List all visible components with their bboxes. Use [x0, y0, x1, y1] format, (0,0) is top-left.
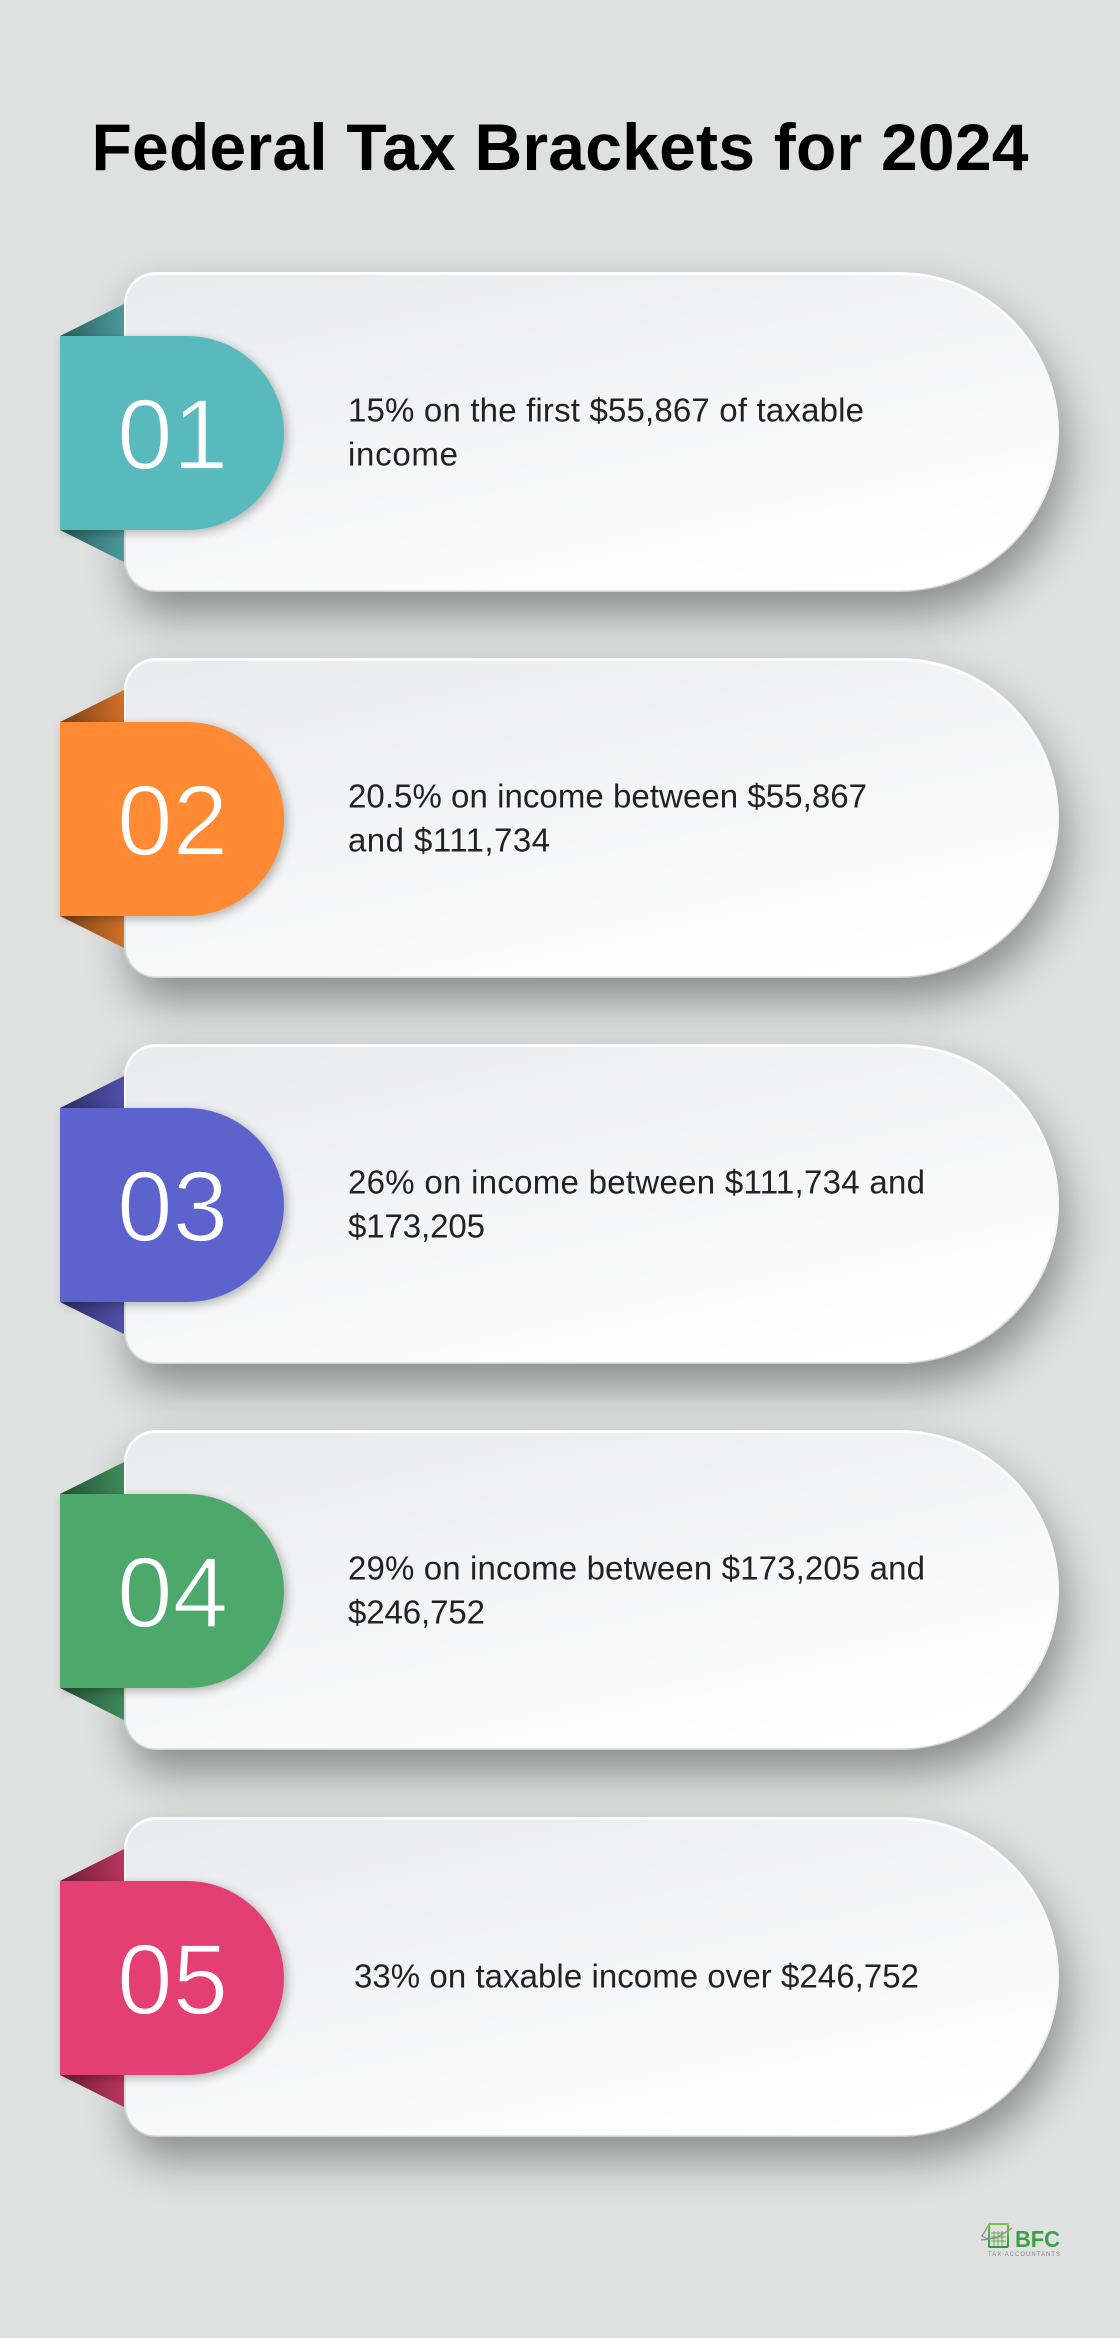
fold: top and bottom of tab 01	[60, 304, 124, 562]
number tab 05	[60, 1881, 284, 2075]
number tab 03: 03	[117, 1151, 228, 1263]
fold: top and bottom of tab 02	[60, 690, 124, 948]
number tab 01	[60, 336, 284, 530]
fold: top and bottom of tab 03	[60, 1076, 124, 1334]
panel: bracket 03	[60, 1044, 1065, 1386]
text 03: $173,205	[348, 1208, 485, 1244]
logo: BFC Tax Accountants	[981, 2223, 1060, 2258]
text 03	[348, 1164, 925, 1244]
number tab 04	[60, 1494, 284, 1688]
text 02	[348, 778, 867, 858]
text 02: and $111,734	[348, 822, 550, 858]
panel: bracket 01	[60, 272, 1065, 614]
icon: calculator	[981, 2223, 1012, 2247]
number tab 01: 01	[117, 379, 228, 491]
panel: bracket 04	[60, 1430, 1065, 1772]
text 03: 26% on income between $111,734 and	[348, 1164, 925, 1200]
number tab 02: 02	[117, 765, 228, 877]
text 04	[348, 1550, 925, 1630]
number tab 02	[60, 722, 284, 916]
text 01	[348, 392, 864, 472]
logo tagline: TAX ACCOUNTANTS	[988, 2252, 1060, 2258]
number tab 04: 04	[117, 1537, 228, 1649]
fold: top and bottom of tab 05	[60, 1849, 124, 2107]
number tab 05: 05	[117, 1924, 228, 2036]
logo wordmark: BFC	[1015, 2226, 1060, 2252]
number tab 03	[60, 1108, 284, 1302]
text 01: income	[348, 436, 458, 472]
text 02: 20.5% on income between $55,867	[348, 778, 867, 814]
fold: top and bottom of tab 04	[60, 1462, 124, 1720]
text 05: 33% on taxable income over $246,752	[354, 1958, 919, 1994]
panel: bracket 05	[60, 1817, 1065, 2159]
text 04: 29% on income between $173,205 and	[348, 1550, 925, 1586]
panel: bracket 02	[60, 658, 1065, 1000]
text 01: 15% on the first $55,867 of taxable	[348, 392, 864, 428]
title: Federal Tax Brackets for 2024	[92, 110, 1029, 184]
text 04: $246,752	[348, 1594, 485, 1630]
